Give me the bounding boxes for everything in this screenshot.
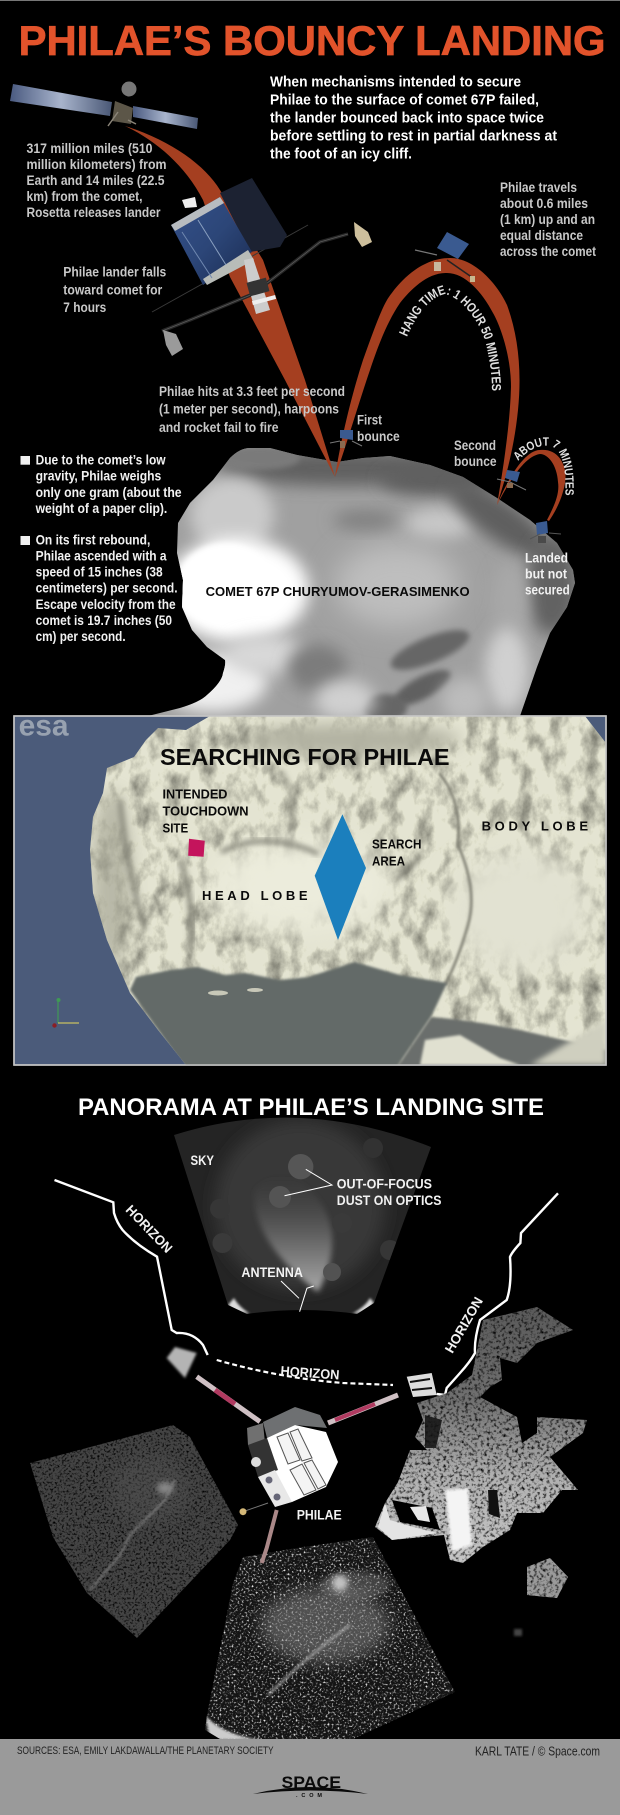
icon: Philae at second bounce: [497, 470, 526, 490]
heading: searching for Philae: SEARCHING FOR PHILAE: [160, 744, 450, 770]
label: out-of-focus dust: DUST ON OPTICS: [337, 1193, 442, 1208]
label: sky: SKY: [190, 1153, 214, 1168]
caption: landed: secured: [525, 583, 570, 598]
horizon dotted line: [217, 1360, 393, 1385]
caption: lander falls: 7 hours: [63, 300, 106, 315]
label: search area: SEARCH: [372, 837, 421, 852]
caption: Philae hits: and rocket fail to fire: [159, 420, 279, 435]
bullet: low gravity: Due to the comet’s low: [36, 453, 166, 468]
trajectory: second bounce arc: [497, 450, 566, 521]
label: Philae: PHILAE: [297, 1507, 342, 1522]
label: antenna: ANTENNA: [241, 1265, 303, 1280]
caption: Philae travels: [500, 180, 596, 259]
panorama: fragment: [514, 1629, 522, 1636]
icon: Philae at first bounce: [330, 430, 362, 448]
caption: Philae travels: (1 km) up and an: [500, 212, 595, 227]
bullet: first rebound: On its first rebound,: [36, 532, 150, 548]
pointer: antenna: [281, 1281, 314, 1312]
caption: second bounce: [454, 438, 497, 469]
caption: Philae travels: about 0.6 miles: [500, 196, 588, 211]
bullet: first rebound: [20, 532, 178, 644]
bullet: first rebound: speed of 15 inches (38: [36, 565, 163, 580]
caption: landed: Landed: [525, 550, 568, 565]
logo: Space.com: .COM: [296, 1793, 322, 1799]
label: horizon left: HORIZON: [123, 1202, 175, 1256]
caption: landed: but not: [525, 566, 567, 582]
caption: second bounce: bounce: [454, 454, 497, 469]
label: intended touchdown site: [162, 787, 248, 836]
caption: Philae travels: across the comet: [500, 244, 596, 259]
caption: lander falls: toward comet for: [63, 282, 163, 297]
caption: landed: [525, 550, 570, 598]
icon: Rosetta spacecraft: [10, 82, 198, 129]
label: horizon right: HORIZON: [442, 1294, 486, 1356]
curved label: about 7 minutes: ABOUT 7 MINUTES: [514, 437, 574, 496]
heading: panorama: PANORAMA AT PHILAE’S LANDING SITE: [78, 1094, 544, 1121]
caption: first bounce: [357, 413, 400, 444]
icon: Philae lander large: [152, 178, 372, 356]
comet name label: COMET 67P CHURYUMOV-GERASIMENKO: [206, 584, 470, 599]
label: body lobe: BODY LOBE: [482, 819, 588, 834]
caption: Philae travels: Philae travels: [500, 180, 577, 195]
bullet: first rebound: centimeters) per second.: [36, 581, 178, 596]
intro text: Philae to the surface of comet 67P failed,: [270, 92, 539, 109]
caption: lander falls: [63, 264, 166, 315]
bullet: first rebound: Philae ascended with a: [36, 549, 167, 564]
comet 67P illustration: [150, 448, 575, 716]
panorama: bottom frame: [200, 1535, 460, 1740]
logo: Space.com: SPACE: [282, 1773, 341, 1792]
bullet: low gravity: [20, 453, 182, 516]
label: intended touchdown site: TOUCHDOWN: [162, 804, 248, 819]
caption: Rosetta releases lander: million kilometers) from: [26, 157, 166, 172]
caption: Rosetta releases lander: 317 million miles (510: [26, 141, 152, 156]
icon: Philae top-down: [167, 1347, 437, 1563]
icon: axes: [52, 998, 79, 1028]
marker: search area: [315, 814, 366, 940]
bullet: low gravity: gravity, Philae weighs: [36, 469, 161, 484]
caption: Philae hits: (1 meter per second), harpoons: [159, 402, 339, 417]
comet model image: [80, 710, 610, 1070]
footer: sources: SOURCES: ESA, EMILY LAKDAWALLA/THE PLANETARY SOCIETY: [17, 1745, 274, 1757]
marker: intended touchdown site: [188, 839, 205, 857]
label: search area: AREA: [372, 853, 406, 868]
intro text: When mechanisms intended to secure: [270, 73, 521, 90]
label: head lobe: HEAD LOBE: [202, 888, 308, 903]
icon: Philae landed: [530, 521, 561, 543]
bullet: low gravity: weight of a paper clip).: [35, 501, 167, 516]
caption: Rosetta releases lander: Rosetta releases lander: [26, 205, 161, 220]
bullet: first rebound: Escape velocity from the: [36, 597, 176, 612]
caption: Rosetta releases lander: [26, 141, 166, 220]
caption: first bounce: bounce: [357, 429, 400, 444]
intro text: the lander bounced back into space twice: [270, 110, 544, 127]
label: intended touchdown site: INTENDED: [162, 787, 228, 802]
caption: Rosetta releases lander: Earth and 14 miles (22.5: [26, 173, 165, 188]
horizon line right: [437, 1193, 558, 1395]
trajectory: first bounce arc: [335, 258, 520, 505]
logo: Space.com: [253, 1773, 368, 1799]
caption: Philae hits: [159, 384, 345, 435]
label: out-of-focus dust: OUT-OF-FOCUS: [337, 1176, 432, 1191]
label: out-of-focus dust: [337, 1176, 442, 1208]
panorama: small rock: [527, 1558, 568, 1598]
footer: [0, 1739, 620, 1815]
label: intended touchdown site: SITE: [162, 821, 188, 836]
pointers: dust: [284, 1169, 332, 1196]
caption: Rosetta releases lander: km) from the comet,: [26, 189, 142, 204]
bullet: first rebound: comet is 19.7 inches (50: [36, 613, 172, 628]
panorama: left frame: [30, 1425, 238, 1638]
intro text: [270, 73, 557, 162]
caption: Philae travels: equal distance: [500, 228, 583, 243]
intro text: the foot of an icy cliff.: [270, 145, 412, 162]
title: PHILAE’S BOUNCY LANDING: [19, 17, 606, 64]
bullet: first rebound: cm) per second.: [36, 629, 126, 644]
curved label: hang time: HANG TIME: 1 HOUR 50 MINUTES: [399, 285, 501, 391]
label: horizon centre: HORIZON: [280, 1363, 340, 1383]
icon: Philae at apex: [415, 232, 475, 282]
caption: second bounce: Second: [454, 438, 496, 453]
horizon line left: [54, 1180, 208, 1355]
caption: lander falls: Philae lander falls: [63, 264, 166, 279]
panorama: sky frame: [170, 1110, 435, 1320]
caption: first bounce: First: [357, 413, 382, 428]
bullet: low gravity: only one gram (about the: [36, 485, 182, 500]
esa logo: esa: [19, 710, 69, 742]
label: search area: [372, 837, 421, 868]
panorama: right frame: [370, 1300, 600, 1636]
intro text: before settling to rest in partial darkness at: [270, 128, 557, 144]
panel: searching for Philae: [14, 710, 610, 1070]
trajectory: descent from Rosetta to comet: [125, 126, 335, 477]
caption: Philae hits: Philae hits at 3.3 feet per second: [159, 384, 345, 399]
